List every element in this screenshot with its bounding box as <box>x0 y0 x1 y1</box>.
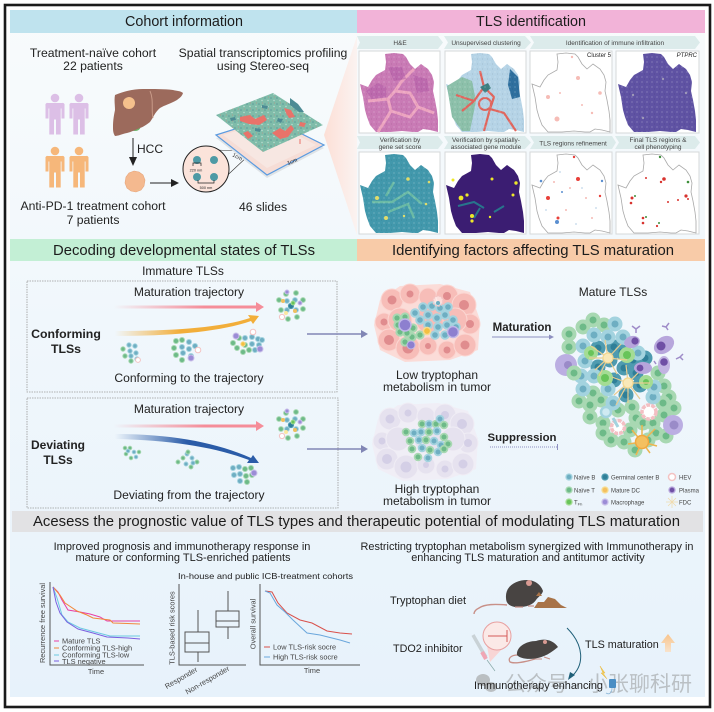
icon: spatial transcriptomics slides: 1cm <box>231 152 243 163</box>
heading: prognostic value <box>12 511 703 532</box>
label: low tryptophan: Low tryptophan <box>396 368 478 382</box>
treatment-naive cohort label: Treatment-naïve cohort <box>30 46 156 60</box>
step labels: Verification by <box>380 137 420 144</box>
chart: risk score boxplot: TLS-based risk scores <box>168 591 176 665</box>
label: suppression: Suppression <box>488 432 557 444</box>
arrow: suppression <box>490 444 558 450</box>
legend: cell types: T <box>574 500 578 506</box>
heading: identifying factors: Identifying factors affecting TLS maturation <box>392 243 674 259</box>
arrow: tumor to capture chip <box>150 179 179 187</box>
chart: recurrence free survival: Mature TLS <box>62 636 101 646</box>
icon: syringe <box>473 635 495 671</box>
arrow: deviating curve <box>115 434 259 463</box>
image: TLS regions refinement <box>532 154 610 233</box>
label: TDO2 inhibitor: TDO2 inhibitor <box>393 643 463 655</box>
label: conforming to the trajectory: Conforming to the trajectory <box>114 371 265 385</box>
icon: orange patients <box>45 147 89 188</box>
image: unsupervised clustering <box>446 53 524 132</box>
image: PTPRC <box>618 53 698 132</box>
legend: cell types: Macrophage <box>611 500 645 506</box>
step labels: associated gene module <box>451 144 522 151</box>
box: deviating TLSs <box>27 398 338 508</box>
spatial transcriptomics label: using Stereo-seq <box>217 59 309 73</box>
icon: spot magnifier: 220 nm <box>190 168 202 172</box>
image: PTPRC: PTPRC <box>677 53 698 59</box>
immature cluster 1 <box>123 446 141 460</box>
heading: decoding developmental states <box>10 239 357 261</box>
naive T cells <box>564 314 680 456</box>
icon: spatial transcriptomics slides: 1cm <box>287 157 299 167</box>
step labels: Identification of immune infiltration <box>566 40 665 47</box>
legend: cell types: FDC <box>679 500 692 506</box>
step labels <box>379 40 687 151</box>
macrophages <box>555 354 683 435</box>
panel: TLS identification <box>357 10 705 234</box>
label: TLS maturation: TLS maturation <box>585 639 659 651</box>
icon: infusion <box>600 666 616 694</box>
chart: recurrence free survival: Recurrence free survival <box>38 583 47 663</box>
text: improved prognosis: Improved prognosis and immunotherapy response in <box>54 541 310 553</box>
legend: cell types: Plasma <box>679 488 700 494</box>
label: HCC: HCC <box>137 142 163 156</box>
germinal centre B cells <box>592 342 650 400</box>
arrow: maturation <box>492 334 554 340</box>
label: conforming TLSs: TLSs <box>51 342 81 356</box>
image: gene set score <box>360 154 438 233</box>
illustration: mature TLS <box>555 314 683 456</box>
image: final TLS regions <box>618 154 696 233</box>
chart: overall survival: Time <box>304 666 320 675</box>
T follicular helper cells <box>586 348 651 387</box>
chart: overall survival <box>248 584 360 675</box>
step labels: Verification by spatially- <box>452 137 520 144</box>
chart: recurrence free survival: Time <box>88 667 104 676</box>
tumor: low tryptophan <box>374 284 480 362</box>
legend: cell types: HEV <box>679 476 691 482</box>
label: mature TLSs: Mature TLSs <box>579 285 647 299</box>
arrow: maturation trajectory <box>114 421 264 431</box>
treatment-naive cohort label: 22 patients <box>63 59 123 73</box>
follicular dendritic cells <box>589 340 650 405</box>
heading: prognostic value: Acesess the prognostic value of TLS types and therapeutic potential of modulating TLS maturation <box>33 514 680 530</box>
image: cluster 5 <box>532 53 612 132</box>
heading: decoding developmental states: Decoding developmental states of TLSs <box>53 243 315 259</box>
label: immature TLSs: Immature TLSs <box>142 264 224 278</box>
step labels: H&E <box>393 40 407 47</box>
label: low tryptophan: metabolism in tumor <box>383 380 491 394</box>
heading: cohort information: Cohort information <box>125 14 243 30</box>
label: deviating TLSs: TLSs <box>43 453 73 467</box>
immature cluster 2 <box>172 338 201 362</box>
arrow: deviating to high tryptophan <box>307 445 368 453</box>
mature dendritic cell <box>628 425 657 455</box>
connector wedge <box>324 36 357 235</box>
label: maturation trajectory: Maturation trajectory <box>134 285 245 299</box>
immature cluster 2 <box>176 450 199 469</box>
spatial transcriptomics label: Spatial transcriptomics profiling <box>179 46 347 60</box>
icon: spot magnifier: 500 nm <box>200 186 212 190</box>
chart: overall survival: Low TLS-risk socre <box>273 642 336 652</box>
label: maturation: Maturation <box>493 322 551 334</box>
icon: tumor tissue <box>125 171 145 192</box>
panel frames <box>359 51 699 234</box>
legend: cell types: Germinal center B <box>611 476 659 482</box>
panel: decoding developmental states <box>10 239 357 508</box>
legend: cell types: Naïve B <box>574 476 595 482</box>
label: anti-PD-1 cohort: Anti-PD-1 treatment cohort <box>21 199 165 213</box>
icon: inhibitor circle <box>483 622 511 662</box>
mature TLS mini <box>277 409 305 440</box>
title: ICB cohorts: In-house and public ICB-treatment cohorts <box>178 571 353 581</box>
label: deviating from the trajectory: Deviating from the trajectory <box>113 488 266 502</box>
chart: risk score boxplot <box>163 584 246 696</box>
icon: mouse <box>509 640 558 663</box>
overlapping naive T cell <box>568 368 580 378</box>
immature cluster 3 <box>230 329 264 354</box>
label: conforming TLSs: Conforming <box>31 327 101 341</box>
icon: up arrow <box>661 634 675 652</box>
image: cluster 5: Cluster 5 <box>587 53 612 59</box>
step labels: gene set score <box>379 144 422 151</box>
tumor: high tryptophan <box>372 403 478 481</box>
chart: recurrence free survival <box>38 582 144 676</box>
heading: TLS identification: TLS identification <box>476 14 586 30</box>
step labels: Final TLS regions & <box>630 137 686 144</box>
high endothelial venules <box>601 405 656 434</box>
chart: risk score boxplot: Responder <box>163 665 199 691</box>
arrow: conforming to low tryptophan <box>307 330 368 338</box>
chart: risk score boxplot: Non-responder <box>184 664 231 696</box>
icon: spatial transcriptomics slides <box>216 93 324 178</box>
step labels: Unsupervised clustering <box>451 40 521 47</box>
icon: purple patients <box>45 94 89 134</box>
label: deviating TLSs: Deviating <box>31 438 85 452</box>
chart: recurrence free survival: TLS negative <box>62 657 106 666</box>
panel: prognostic value <box>12 511 703 696</box>
legend: cell types: Mature DC <box>611 488 641 494</box>
naive B cells <box>576 318 660 408</box>
heading: TLS identification <box>357 10 705 33</box>
immature cluster 1 <box>121 343 140 363</box>
legend: cell types: Fh <box>578 502 582 506</box>
arrow: liver to tumor <box>129 138 137 166</box>
image: H&E <box>360 53 438 132</box>
label: anti-PD-1 cohort: 7 patients <box>67 213 119 227</box>
process chevrons <box>357 36 700 149</box>
heading: identifying factors <box>357 239 705 261</box>
chart: overall survival: High TLS-risk socre <box>273 652 338 662</box>
label: immunotherapy enhancing: Immunotherapy enhancing <box>474 680 603 692</box>
icon: mouse with food <box>474 580 567 614</box>
chart: recurrence free survival: Conforming TLS-low <box>62 650 130 660</box>
chart: recurrence free survival: Conforming TLS-high <box>62 644 132 652</box>
image: spatial gene module <box>446 154 524 233</box>
legend: cell types <box>566 474 700 508</box>
label: high tryptophan: metabolism in tumor <box>383 494 491 508</box>
plasma cells <box>623 332 678 374</box>
label: maturation trajectory: Maturation trajectory <box>134 402 245 416</box>
watermark: 公众号 · 小张聊科研 <box>505 673 692 696</box>
text: improved prognosis: mature or conforming TLS-enriched patients <box>75 552 291 564</box>
step labels: cell phenotyping <box>635 144 682 151</box>
mature TLS mini <box>277 290 305 321</box>
arrow: conforming curve <box>115 315 259 336</box>
icon: liver <box>113 89 183 136</box>
arrow: maturation loop <box>567 628 581 680</box>
panel: cohort information <box>10 10 357 227</box>
immature cluster 3 <box>230 464 257 484</box>
chart: overall survival: Overall survival <box>248 598 258 649</box>
label: high tryptophan: High tryptophan <box>395 482 479 496</box>
panel: identifying factors <box>307 239 705 508</box>
icon: spot magnifier <box>183 146 251 192</box>
text: restricting tryptophan: Restricting tryptophan metabolism synergized with Immunotherapy in <box>361 541 693 553</box>
text: restricting tryptophan: enhancing TLS maturation and antitumor activity <box>411 552 645 564</box>
arrow: maturation trajectory <box>114 302 264 312</box>
step labels: TLS regions refinement <box>539 140 607 148</box>
legend: cell types: Naïve T <box>574 488 595 494</box>
heading: cohort information <box>10 10 357 33</box>
label: tryptophan diet: Tryptophan diet <box>390 595 466 607</box>
antibodies <box>632 323 683 364</box>
label: 46 slides: 46 slides <box>239 200 287 214</box>
box: conforming TLSs <box>27 281 337 392</box>
